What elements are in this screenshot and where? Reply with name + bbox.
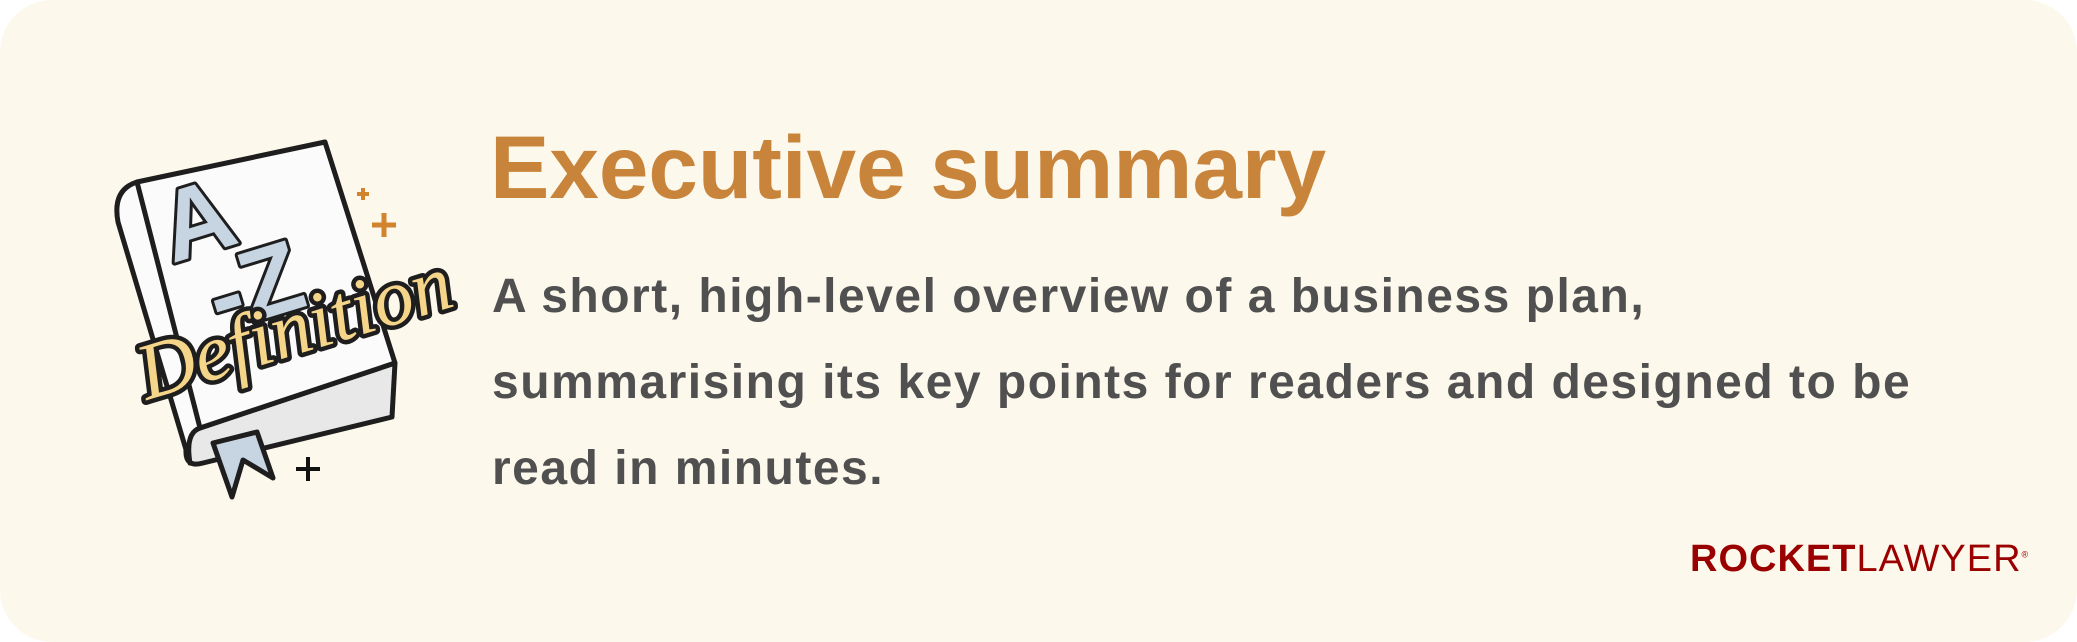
text block: definition: read in minutes.: [492, 442, 884, 495]
text block: definition: summarising its key points for readers and designed to be: [492, 356, 1911, 409]
icon: A-Z definition book: -Z: [193, 219, 316, 354]
text block: definition: [492, 270, 1911, 495]
icon: A-Z definition book: A: [146, 156, 248, 284]
icon: A-Z definition book: [114, 140, 462, 500]
icon: A-Z definition book: Definition: [125, 239, 462, 418]
title: Executive summary: [490, 117, 1326, 217]
logo: Rocket Lawyer: ROCKETLAWYER®: [1690, 538, 2029, 580]
text block: definition: A short, high-level overview of a business plan,: [492, 270, 1645, 323]
